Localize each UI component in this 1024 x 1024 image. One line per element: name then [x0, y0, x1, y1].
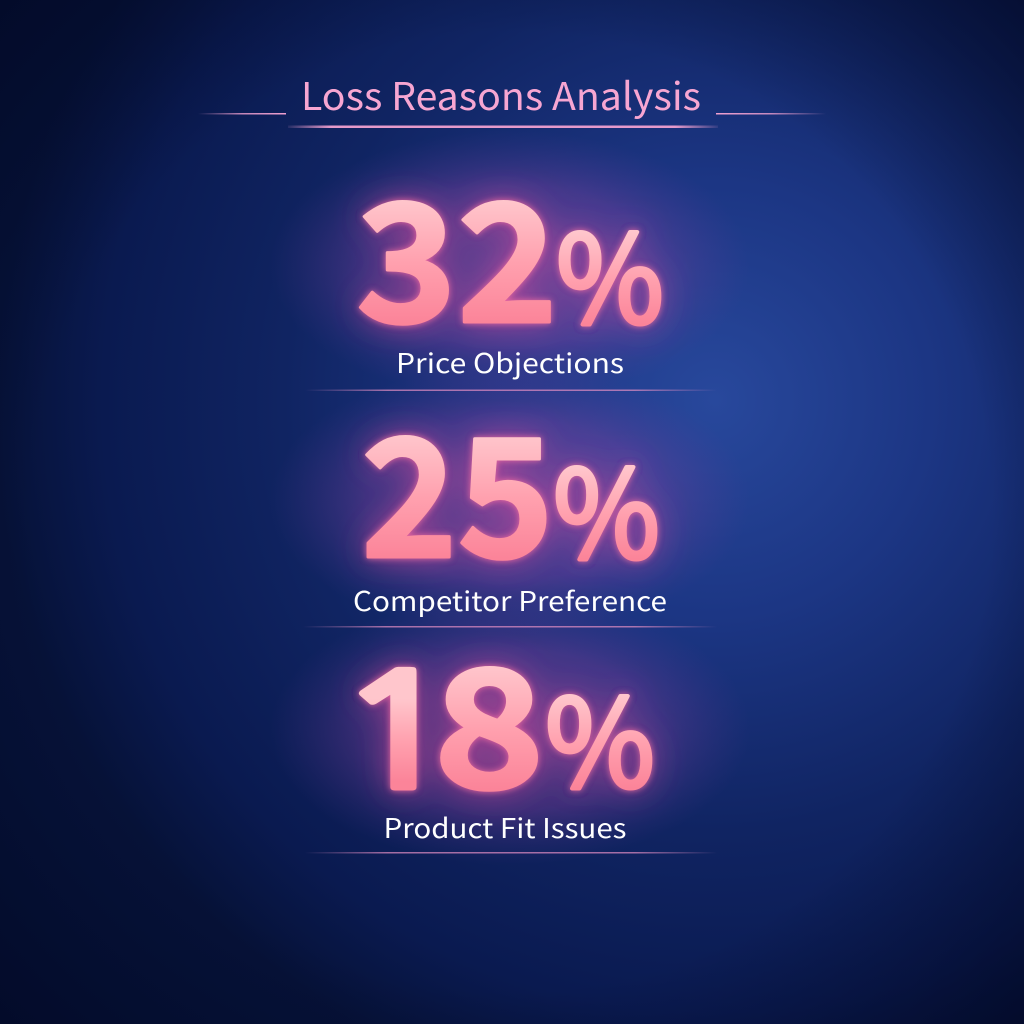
- stat: 25% competitor preference: Competitor Preference: [353, 580, 667, 619]
- stat: 18% product fit issues: %: [545, 646, 655, 823]
- stat: 25% competitor preference: %: [553, 417, 660, 594]
- stat: 32% price objections: %: [556, 182, 664, 359]
- stat: 32% price objections: 32: [356, 133, 558, 370]
- stat: 18% product fit issues: Product Fit Issues: [384, 807, 626, 846]
- title: Loss Reasons Analysis: [301, 66, 701, 121]
- stat: 18% product fit issues: [305, 599, 717, 854]
- stat: 32% price objections: Price Objections: [396, 342, 624, 381]
- stat: 25% competitor preference: [303, 368, 717, 628]
- stat: 32% price objections: [305, 133, 717, 391]
- stat: 25% competitor preference: 25: [361, 368, 554, 605]
- stat: 18% product fit issues: 1: [332, 654, 465, 813]
- stat: 18% product fit issues: 8: [433, 599, 545, 836]
